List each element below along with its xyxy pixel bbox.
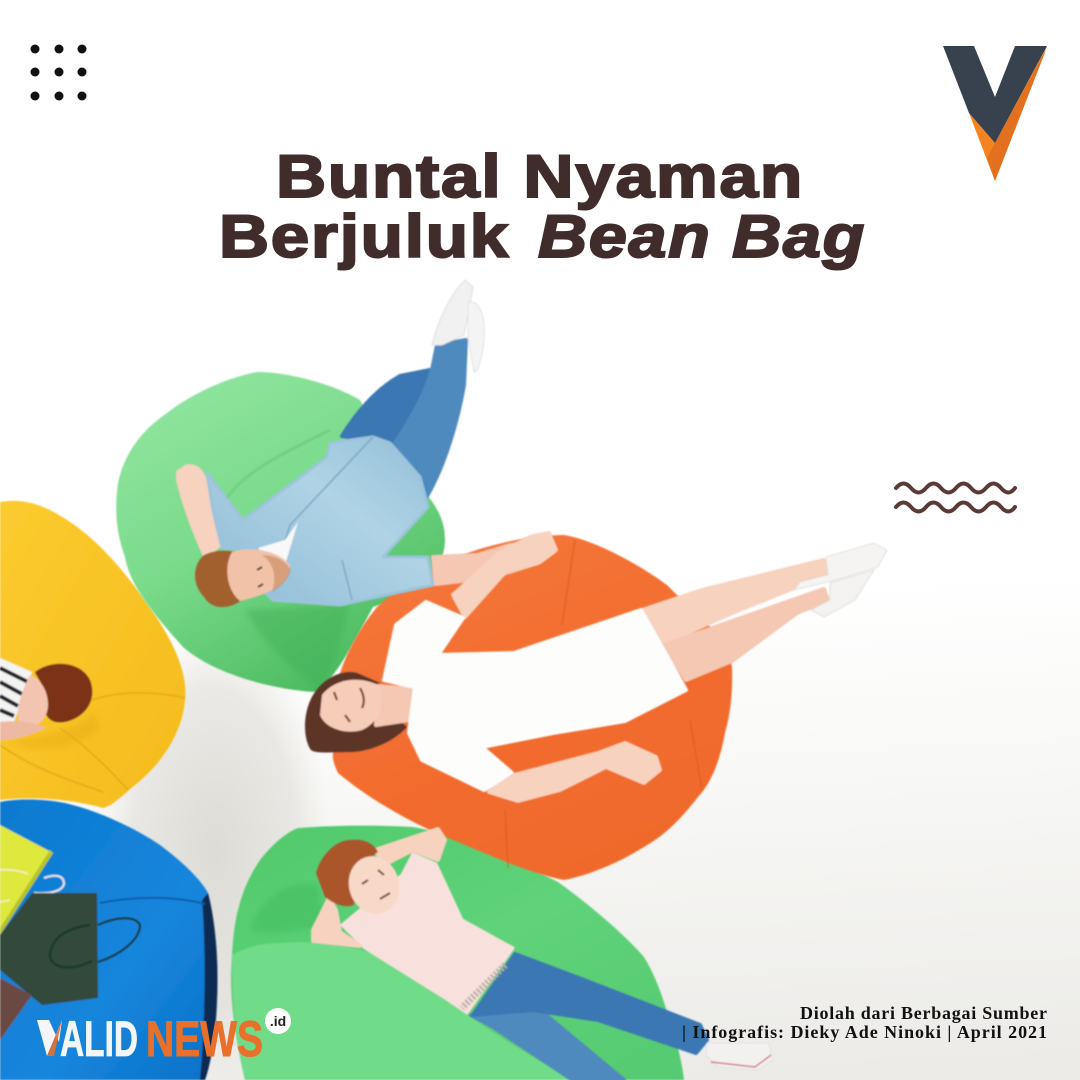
title: Berjuluk [219,203,510,270]
woman: shoes [794,543,887,617]
man: beard [262,555,291,592]
man: front leg jeans [395,340,466,496]
logo: ALID wordmark: ALID [60,1011,138,1067]
woman [305,533,887,801]
girl: pink top [342,854,513,1013]
woman: raised leg [642,560,830,645]
decorative dot grid [30,44,86,100]
logo: Validnews [37,1008,291,1067]
logo: NEWS wordmark: NEWS [146,1011,263,1067]
girl: front leg jeans [473,954,707,1053]
girl [313,829,773,1080]
title [219,143,866,270]
logo: V mark [943,46,1047,181]
bag: lime green [0,825,64,935]
woman: lower leg [664,589,828,680]
source credits [682,1003,1047,1042]
logo: id badge [265,1008,291,1034]
man: hair [195,551,245,607]
logo: id badge: .id [270,1013,286,1029]
woman: lower arm and hand [489,743,660,801]
woman: hair [305,672,407,752]
man: shoes [432,280,484,372]
girl: arm over head [375,829,445,865]
floor shadow [100,620,330,1080]
man: eyes [257,567,263,587]
girl: face [342,851,406,919]
child arm [0,721,46,740]
source credits: | Infografis: Dieky Ade Ninoki | April 2021 [682,1022,1047,1042]
decorative wave lines [896,484,1015,512]
bag: dark green [0,893,140,1005]
woman: upper arm and clasped hands [453,533,556,617]
child striped shirt [0,658,32,722]
man: face [227,549,290,601]
title: Buntal Nyaman [276,143,804,210]
girl: hair [316,840,378,906]
source credits: Diolah dari Berbagai Sumber [800,1003,1047,1023]
girl: bent arm [313,898,360,946]
bean bag: yellow with sleeping child [0,501,185,808]
bean bag: blue with shopping bags [0,799,218,1080]
girl: back leg jeans [471,1010,624,1080]
man: back leg jeans [342,370,436,446]
bean bag: orange [333,535,732,880]
woman: face [320,680,382,732]
girl: shoe [706,1043,773,1070]
bean bag: green under girl [231,826,684,1080]
man: raised arm [178,466,220,556]
title: Bean Bag [538,203,866,270]
bean bag: green under man [116,372,445,692]
woman: facial features [334,688,364,722]
child hair [35,664,92,723]
man: shirt [207,437,433,605]
man: outstretched forearm [433,543,553,584]
bag: brown [0,978,32,1040]
woman: neck [376,686,413,725]
girl: facial features [362,870,390,899]
woman: white dress [384,602,686,790]
man [178,280,553,607]
child face [18,675,48,727]
logo: V glyph [37,1020,62,1056]
